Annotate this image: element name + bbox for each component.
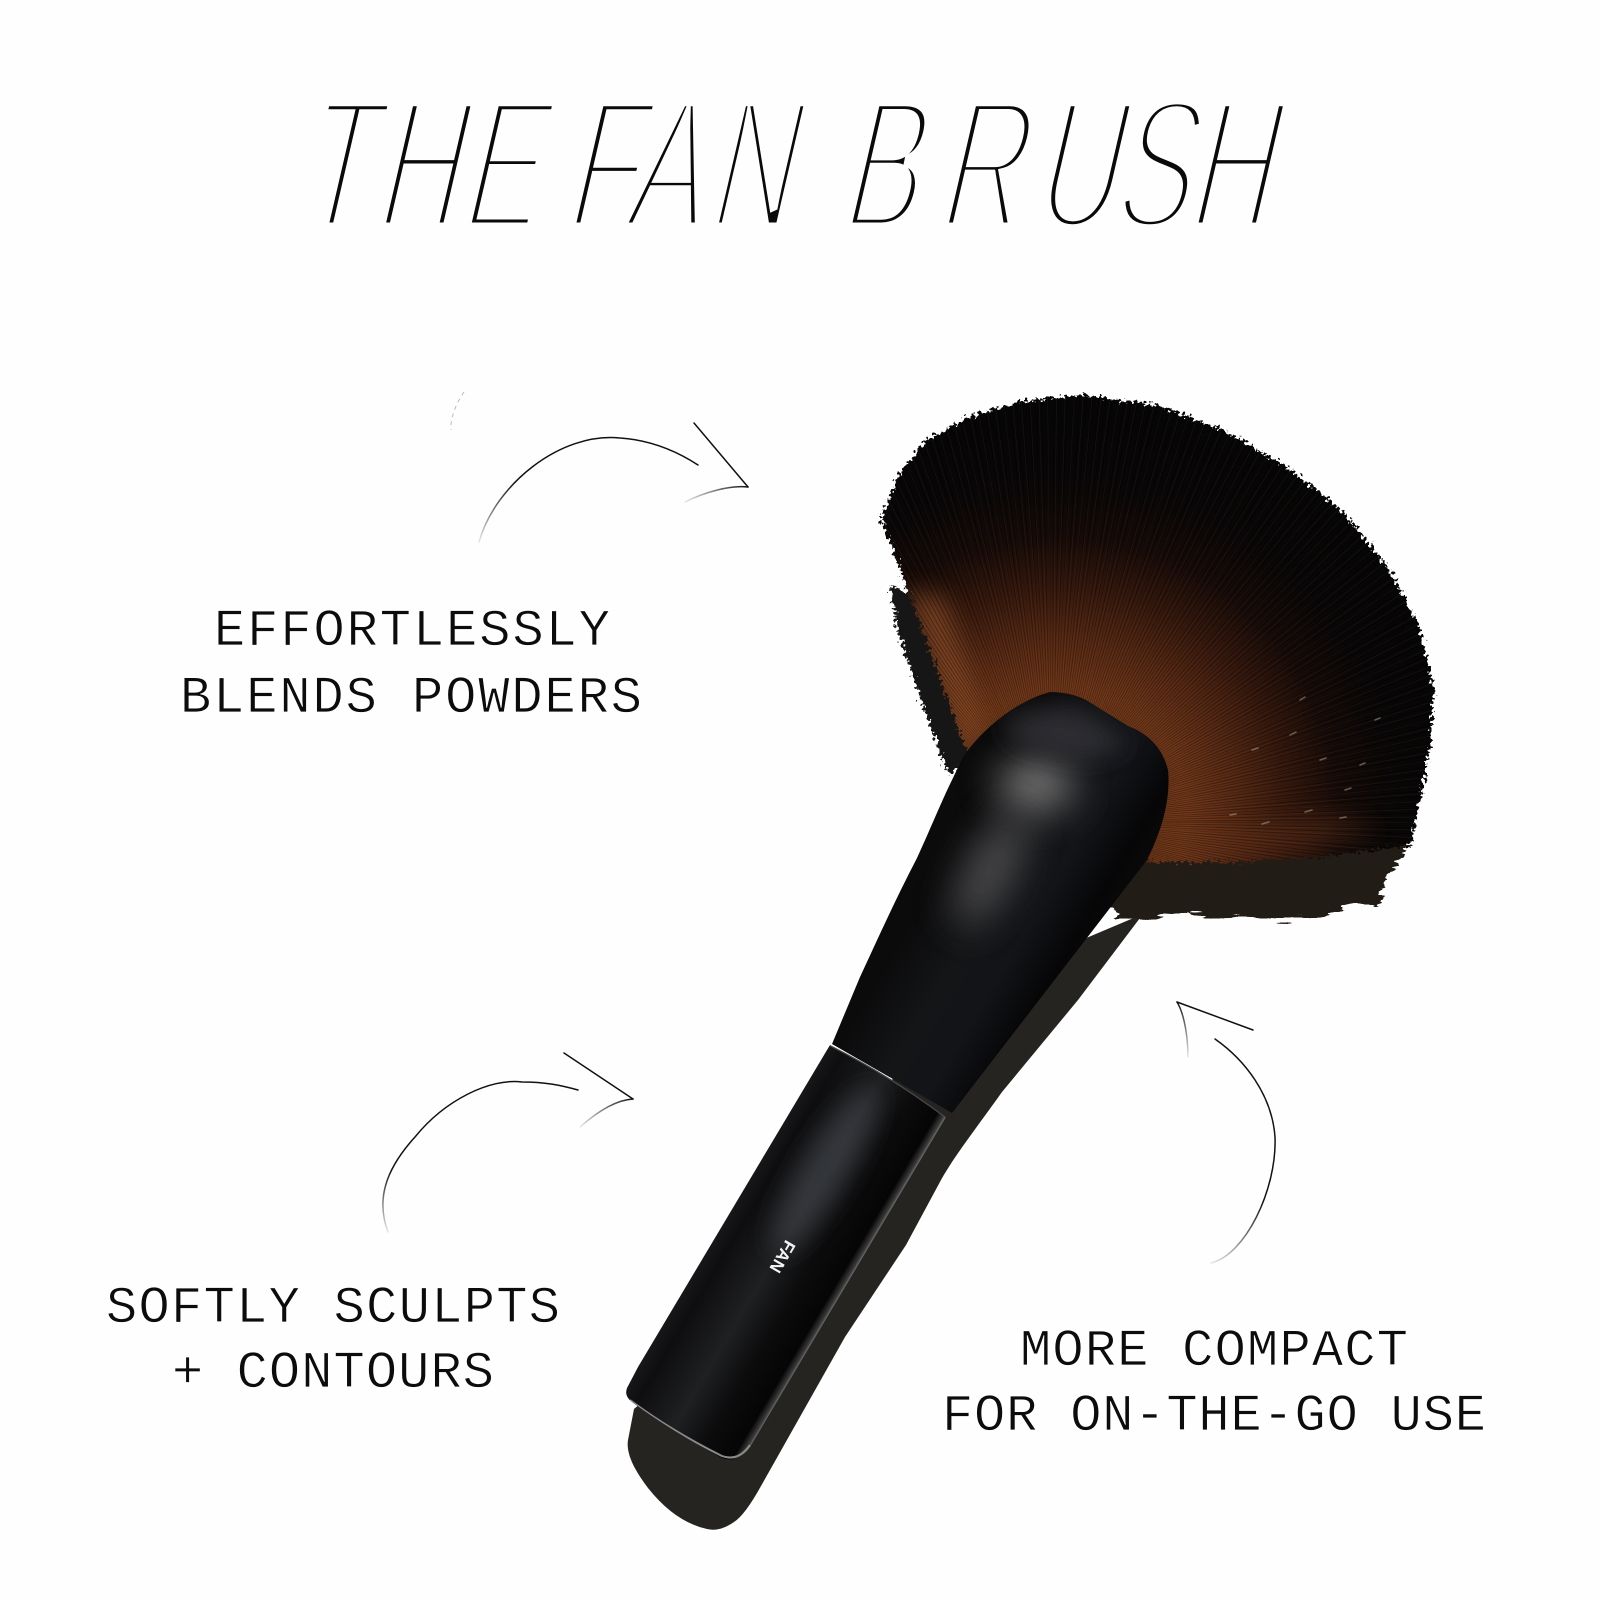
text block: more compact for on-the-go use: FOR ON-THE-GO USE [942, 1387, 1486, 1446]
arrow: sculpts and contours [383, 1053, 633, 1232]
lower right brown streak [1245, 810, 1368, 855]
bristle lines [906, 545, 1363, 866]
illustration: fan brush [600, 370, 1460, 1530]
text block: effortlessly blends powders: EFFORTLESSLY [214, 602, 610, 661]
text block: softly sculpts and contours: + CONTOURS [172, 1344, 494, 1403]
left bristle shadow [890, 585, 975, 774]
handle bottom edge [630, 1400, 750, 1458]
arrow: more compact [1177, 1002, 1275, 1263]
bristle fan [878, 392, 1438, 866]
left brown highlight [905, 590, 985, 752]
ferrule highlight [997, 759, 1073, 811]
title: THE FAN BRUSH [286, 62, 1306, 268]
ferrule [832, 692, 1169, 1113]
ferrule top [1000, 707, 1130, 760]
text block: effortlessly blends powders: BLENDS POWDERS [180, 669, 642, 728]
arrow: blends powders [451, 392, 748, 542]
handle highlight [768, 1088, 882, 1252]
handle label: FAN [766, 1237, 799, 1276]
bristle cast shadow [1100, 843, 1411, 925]
text block: more compact for on-the-go use: MORE COMPACT [1020, 1322, 1408, 1381]
handle top edge [830, 1045, 946, 1117]
text block: softly sculpts and contours: SOFTLY SCULPTS [106, 1279, 560, 1338]
handle cast shadow [628, 914, 1143, 1530]
bristle speckles [1230, 697, 1380, 824]
handle [626, 1045, 946, 1460]
